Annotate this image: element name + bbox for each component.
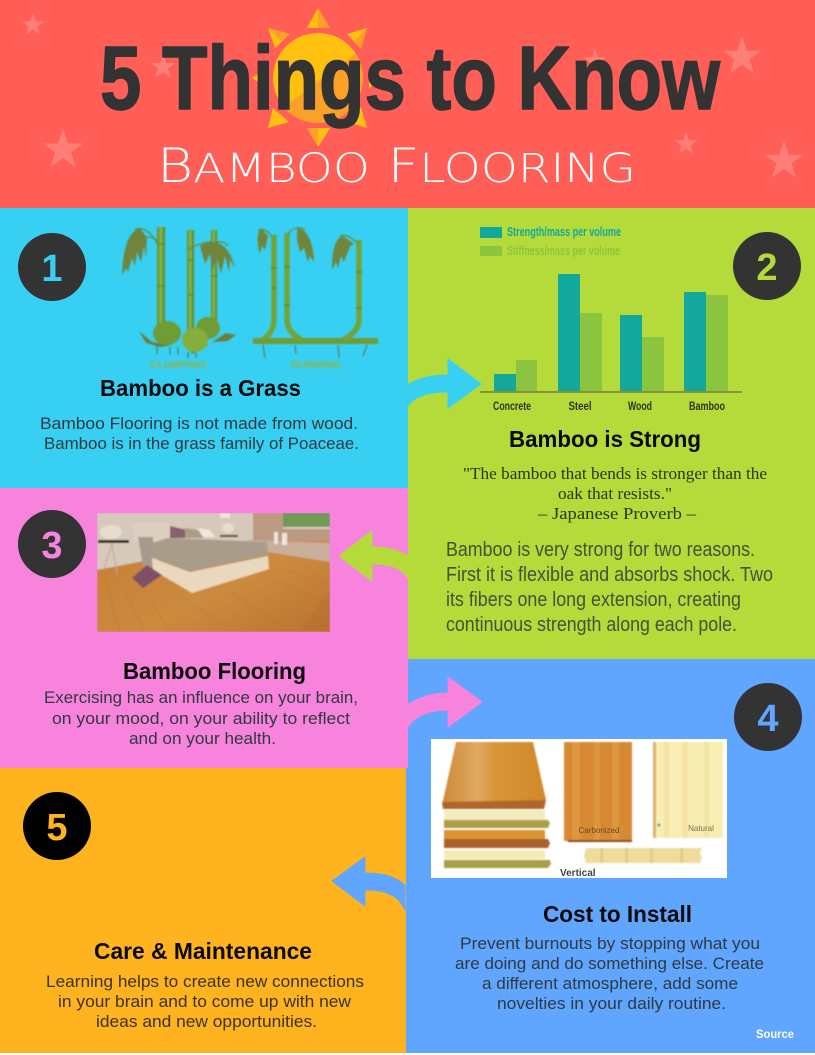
photo: bedroom with bamboo floor	[97, 513, 330, 632]
body text: on your mood, on your ability to reflect	[52, 709, 350, 728]
heading: Cost to Install	[543, 901, 692, 927]
arrow: panel 4 to panel 5	[332, 857, 405, 910]
chart category labels: Concrete	[493, 399, 531, 413]
chart category labels: Bamboo	[689, 399, 725, 413]
arrow: panel 2 to panel 3	[339, 531, 408, 581]
subtitle: BAMBOO FLOORING	[157, 139, 636, 194]
bar chart: strength and stiffness	[480, 224, 742, 413]
sample captions: Natural	[688, 824, 714, 833]
panel 2: bamboo is strong	[407, 208, 815, 659]
chart bars	[480, 274, 742, 393]
illustration captions: RUNNING	[291, 360, 341, 371]
quote	[463, 464, 767, 523]
illustration: clumping and running bamboo	[122, 227, 378, 371]
body text: its fibers one long extension, creating	[446, 589, 741, 611]
body text: Learning helps to create new connections	[46, 972, 364, 991]
body text: Bamboo Flooring is not made from wood.	[40, 414, 358, 433]
body text: a different atmosphere, add some	[482, 974, 738, 993]
body text: ideas and new opportunities.	[96, 1012, 317, 1031]
chart legend: Stiffness/mass per volume	[507, 243, 620, 258]
quote: – Japanese Proverb –	[537, 504, 697, 523]
body text: continuous strength along each pole.	[446, 614, 737, 636]
heading: Care & Maintenance	[94, 938, 312, 964]
sample captions: Carbonized	[579, 826, 619, 835]
chart legend: Strength/mass per volume	[507, 224, 621, 239]
arrow: panel 1 to panel 2	[407, 359, 481, 408]
panel 5: care and maintenance	[0, 768, 406, 1053]
panel 1: bamboo is a grass	[0, 208, 408, 488]
heading: Bamboo is a Grass	[100, 375, 301, 401]
body text: Prevent burnouts by stopping what you	[460, 934, 760, 953]
body text: Bamboo is in the grass family of Poaceae.	[44, 434, 359, 453]
body text: are doing and do something else. Create	[455, 954, 764, 973]
panel: header	[0, 0, 815, 208]
chart category labels: Wood	[628, 399, 652, 413]
heading: Bamboo Flooring	[123, 658, 306, 684]
body text: Bamboo is very strong for two reasons.	[446, 539, 755, 561]
running bamboo	[253, 228, 378, 358]
body text	[455, 934, 764, 1013]
body text	[40, 414, 359, 453]
icon: decorative stars	[22, 14, 803, 177]
photo: bamboo plank samples	[431, 739, 727, 879]
number badge 3	[18, 510, 86, 578]
quote: "The bamboo that bends is stronger than the	[463, 464, 767, 483]
number badge 4	[734, 683, 802, 751]
number badge 2: 2	[756, 247, 778, 289]
panel 4: cost to install	[406, 659, 815, 1053]
number badge 1	[18, 233, 86, 301]
body text: and on your health.	[129, 729, 276, 748]
body text: Exercising has an influence on your brain,	[44, 688, 358, 707]
number badge 3: 3	[41, 525, 63, 567]
number badge 2	[733, 232, 801, 300]
number badge 5: 5	[46, 807, 68, 849]
body text	[46, 972, 364, 1031]
chart category labels	[493, 399, 725, 413]
body text: novelties in your daily routine.	[497, 994, 726, 1013]
heading: Bamboo is Strong	[509, 426, 701, 452]
chart legend	[480, 224, 621, 258]
illustration captions: CLUMPING	[150, 360, 207, 371]
number badge 4: 4	[757, 698, 779, 740]
body text: First it is flexible and absorbs shock. Two	[446, 564, 773, 586]
illustration captions	[150, 360, 341, 371]
quote: oak that resists."	[558, 484, 672, 503]
icon: sun	[252, 8, 384, 147]
number badge 5	[23, 792, 91, 860]
sample captions: Vertical	[560, 868, 596, 879]
clumping bamboo	[122, 227, 236, 358]
body text	[446, 539, 773, 636]
panel 3: bamboo flooring	[0, 488, 408, 768]
sample captions	[560, 824, 714, 879]
chart category labels: Steel	[568, 399, 592, 413]
body text: in your brain and to come up with new	[58, 992, 352, 1011]
arrow: panel 3 to panel 4	[407, 677, 482, 728]
source link: Source	[756, 1027, 794, 1041]
number badge 1: 1	[41, 248, 63, 290]
body text	[44, 688, 358, 748]
